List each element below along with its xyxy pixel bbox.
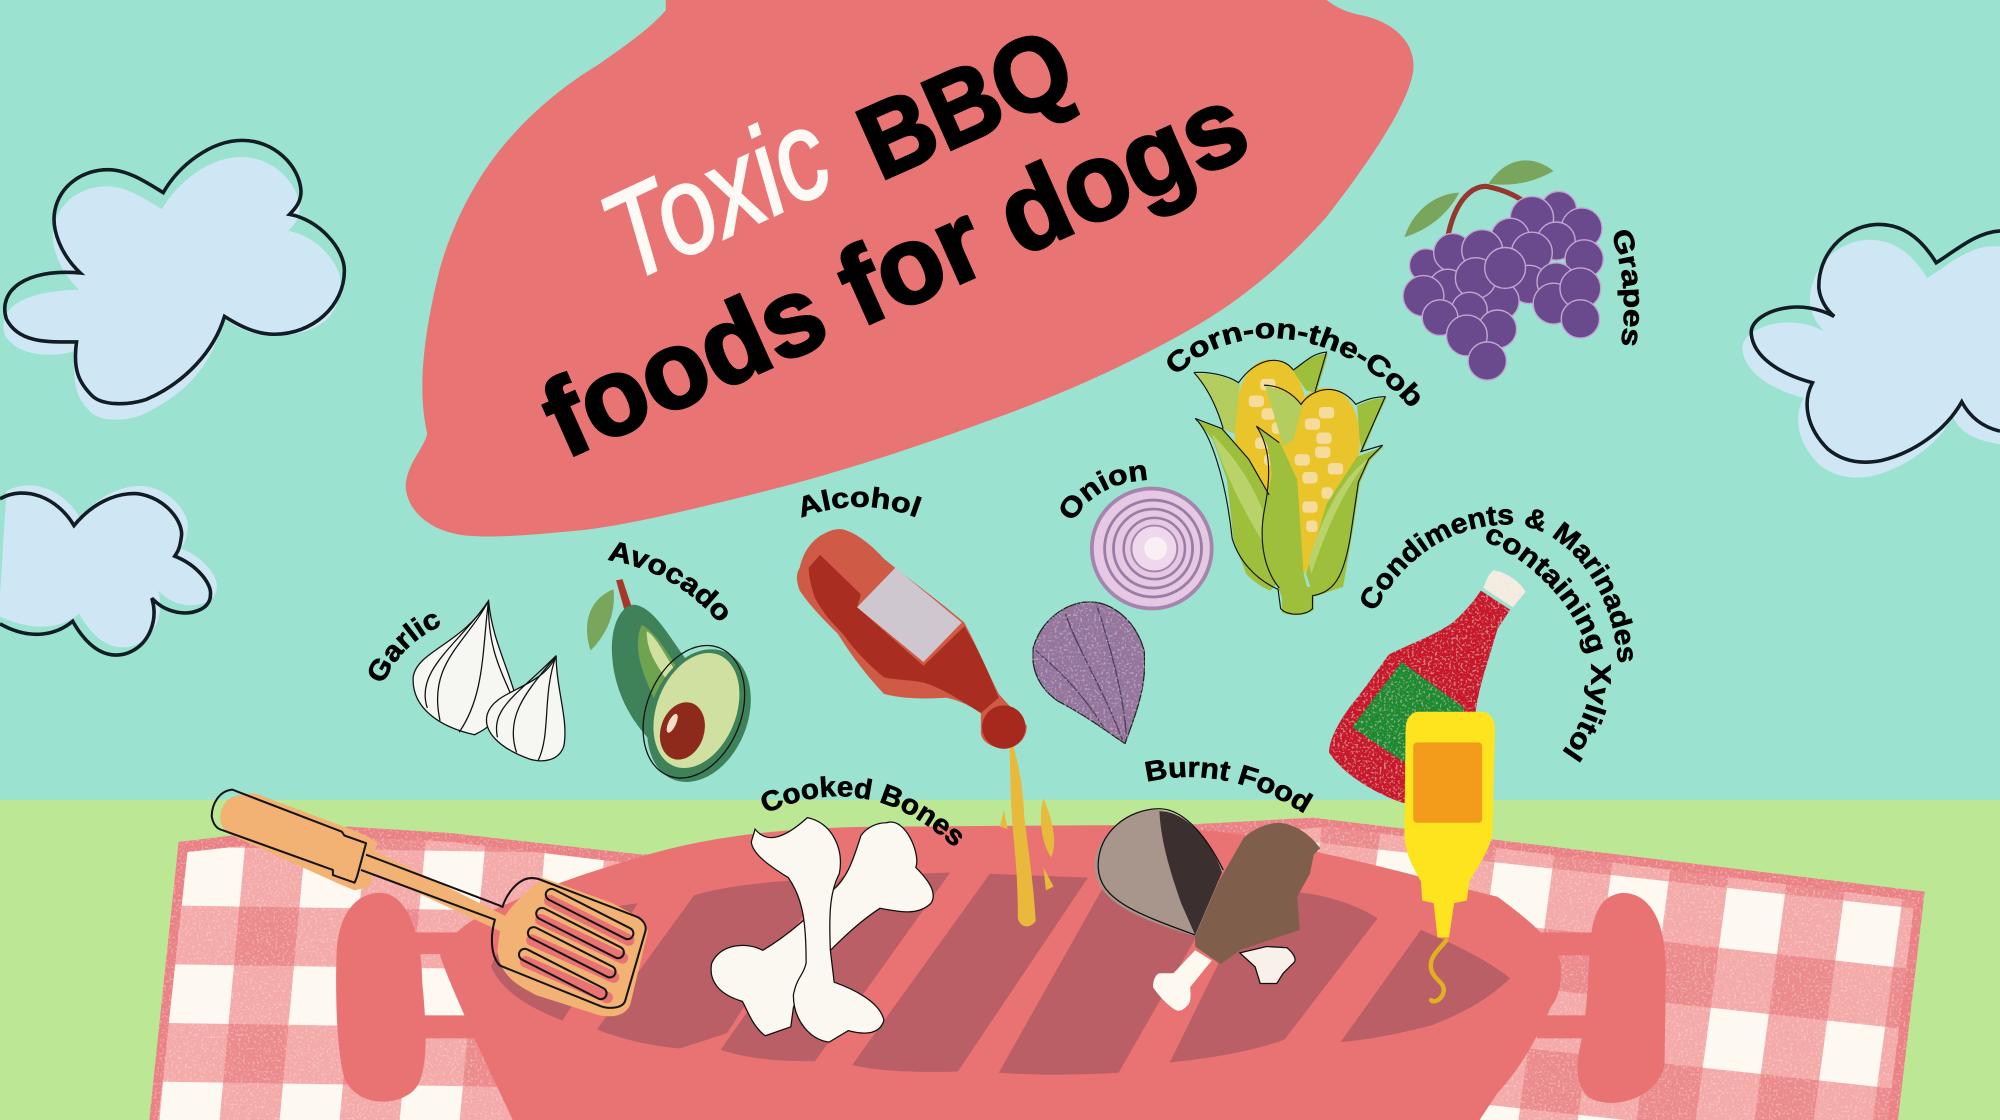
right checks — [1276, 827, 1915, 1120]
label: Avocado: Avocado — [608, 542, 728, 620]
label: Corn-on-the-Cob: Corn-on-the-Cob — [1167, 322, 1420, 406]
grill bars — [491, 872, 1510, 1075]
tablecloth — [149, 818, 1925, 1120]
title word: BBQ: BBQ — [842, 6, 1090, 202]
burnt meat — [1094, 810, 1223, 936]
title word: Toxic: Toxic — [581, 84, 851, 308]
mustard label — [1413, 742, 1482, 823]
label: Onion: Onion — [1060, 465, 1147, 518]
cooked bones — [711, 818, 933, 1042]
label: Grapes: Grapes — [1614, 230, 1640, 346]
spatula fill — [220, 793, 648, 1016]
spatula outline — [212, 790, 646, 1008]
cloth edge — [149, 818, 1925, 1120]
husk highlights — [1212, 434, 1371, 574]
bottle label — [857, 568, 962, 662]
icon: ketchup bottle — [1329, 570, 1526, 804]
burnt drumstick — [1094, 809, 1320, 1011]
label: containing Xylitol: containing Xylitol — [1486, 529, 1611, 763]
mustard squiggle — [1431, 940, 1446, 1001]
BBQ lid — [406, 0, 1413, 536]
front cob — [1288, 388, 1360, 574]
grape cluster — [1403, 191, 1603, 380]
left checks — [158, 837, 663, 1120]
icon: garlic — [413, 601, 565, 761]
left bone — [1153, 950, 1212, 1011]
back cob — [1235, 360, 1306, 498]
label: Burnt Food: Burnt Food — [1144, 760, 1314, 814]
label: Alcohol: Alcohol — [801, 486, 922, 518]
icon: alcohol bottle — [797, 529, 1027, 749]
dark glass — [809, 555, 999, 713]
kernels — [1249, 379, 1343, 532]
icon: avocado — [587, 579, 770, 798]
background: grass — [0, 800, 2000, 1120]
leaf — [587, 589, 614, 651]
cloud: middle left — [0, 485, 217, 655]
right handle — [1537, 893, 1666, 1103]
ketchup label — [1352, 662, 1464, 781]
icon: grapes — [1403, 160, 1603, 380]
cloud: top left — [3, 140, 344, 420]
icon: whole onion — [1033, 602, 1145, 744]
label: Condiments and Marinades: Condiments & Marinades — [1361, 506, 1633, 662]
grape leaves — [1404, 193, 1459, 237]
grill body — [440, 825, 1561, 1120]
cloud: right — [1742, 224, 2000, 477]
spatula — [212, 790, 648, 1016]
charred side — [1159, 811, 1222, 935]
title — [525, 6, 1265, 481]
avocado half — [628, 634, 770, 798]
right bone — [1240, 946, 1295, 983]
grape stem — [1448, 186, 1527, 237]
stem — [616, 579, 633, 612]
whole avocado — [612, 605, 689, 753]
husk leaves — [1195, 353, 1386, 615]
icon: onion slice — [1092, 489, 1212, 608]
left handle — [336, 893, 491, 1102]
drumstick outline — [1098, 809, 1223, 935]
grill — [336, 825, 1666, 1120]
background: sky — [0, 0, 2000, 801]
label: Garlic: Garlic — [368, 614, 440, 681]
bone 2 — [711, 822, 933, 1036]
bottle cap — [982, 705, 1026, 749]
spatula slots — [526, 901, 629, 998]
corn outlines — [1194, 352, 1385, 614]
second leg — [1195, 823, 1320, 964]
pouring liquid — [1000, 730, 1054, 926]
bone 1 — [751, 818, 884, 1042]
icon: mustard bottle — [1404, 712, 1495, 1001]
label: Cooked Bones: Cooked Bones — [761, 776, 962, 846]
title line: foods for dogs: foods for dogs — [525, 63, 1265, 481]
icon: corn — [1194, 352, 1386, 615]
ketchup cap — [1483, 570, 1526, 607]
